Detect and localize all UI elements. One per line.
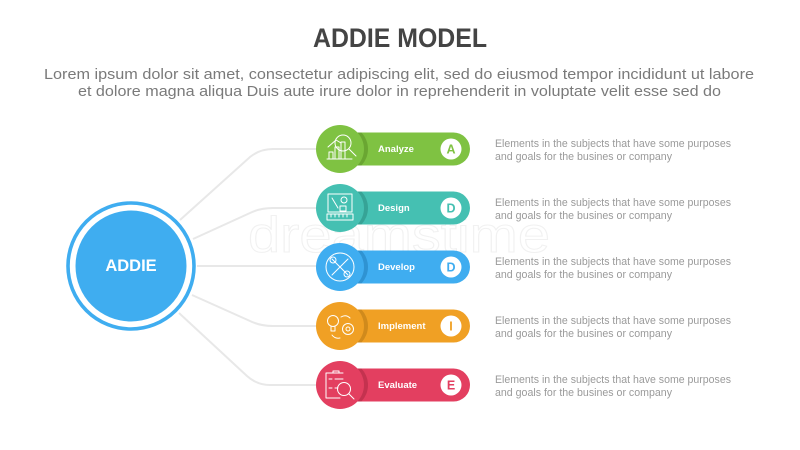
label: Develop: Develop	[378, 262, 415, 273]
description: Analyze	[495, 138, 731, 163]
letter: D: D	[446, 260, 456, 274]
letter: E	[440, 374, 462, 396]
central circle: ADDIE: ADDIE	[105, 257, 157, 275]
icon circle: Design	[316, 184, 368, 232]
description: Analyze: Elements in the subjects that have some purposes	[495, 138, 731, 150]
description: Analyze: and goals for the busines or company	[495, 151, 673, 163]
letter: D	[440, 256, 462, 278]
pill: Design	[340, 192, 470, 224]
description: Evaluate: and goals for the busines or company	[495, 387, 673, 399]
pill: Analyze	[340, 132, 470, 166]
pill: Implement	[340, 310, 470, 342]
icon circle: Develop	[316, 243, 368, 291]
description: Design: and goals for the busines or company	[495, 210, 673, 222]
letter: I: I	[449, 320, 453, 334]
description: Implement: Elements in the subjects that have some purposes	[495, 315, 731, 327]
letter: D: D	[446, 202, 456, 216]
row: Develop	[316, 243, 470, 291]
icon circle: Implement	[316, 302, 368, 350]
letter: I	[440, 316, 462, 336]
description: Develop: Elements in the subjects that have some purposes	[495, 256, 731, 268]
description: Develop: and goals for the busines or company	[495, 269, 673, 281]
description: Implement	[495, 315, 731, 340]
pill: Develop	[340, 250, 470, 284]
icon circle: Evaluate	[316, 361, 368, 409]
subtitle: Lorem ipsum dolor sit amet, consectetur adipiscing elit, sed do eiusmod tempor incididunt ut labore	[44, 66, 754, 83]
description: Evaluate: Elements in the subjects that have some purposes	[495, 374, 731, 386]
row: Analyze	[316, 125, 470, 173]
connector lines	[179, 149, 318, 385]
title: ADDIE MODEL	[313, 23, 487, 53]
description: Evaluate	[495, 374, 731, 399]
letter: D	[440, 198, 462, 218]
subtitle	[44, 66, 754, 100]
letter: E: E	[447, 378, 455, 392]
subtitle: et dolore magna aliqua Duis aute irure dolor in reprehenderit in voluptate velit esse sed do	[78, 83, 721, 100]
label: Analyze: Analyze	[378, 144, 414, 155]
description: Design: Elements in the subjects that have some purposes	[495, 197, 731, 209]
description: Design	[495, 197, 731, 222]
row: Evaluate	[316, 361, 470, 409]
label: Design: Design	[378, 203, 410, 214]
letter: A: A	[446, 142, 456, 156]
row: Design	[316, 184, 470, 232]
description: Implement: and goals for the busines or company	[495, 328, 673, 340]
label: Evaluate: Evaluate	[378, 380, 417, 391]
label: Implement: Implement	[378, 321, 426, 332]
central circle: ADDIE	[68, 203, 194, 329]
watermark: dreamstime	[248, 207, 550, 263]
icon circle: Analyze	[316, 125, 368, 173]
description: Develop	[495, 256, 731, 281]
row: Implement	[316, 302, 470, 350]
letter: A	[440, 138, 462, 160]
pill: Evaluate	[340, 368, 470, 402]
